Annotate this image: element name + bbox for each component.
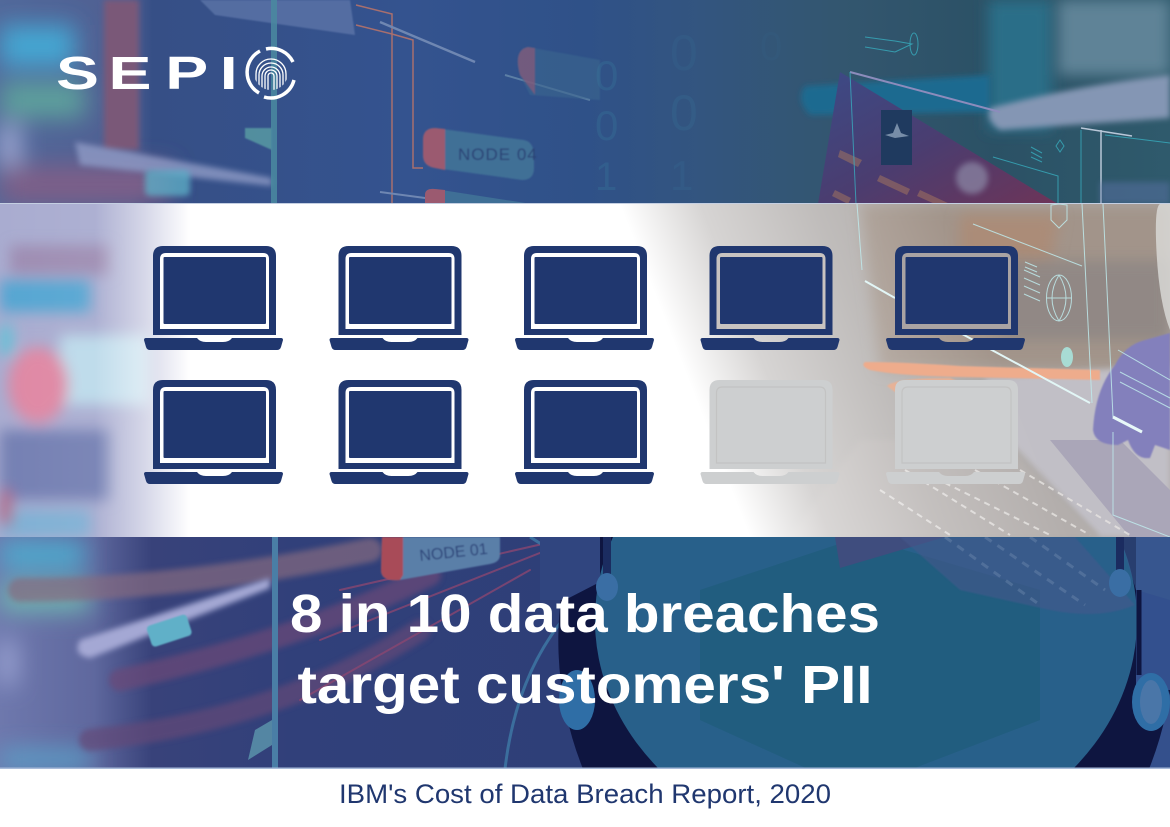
binary digits: 0 [595, 52, 618, 99]
white band [0, 204, 1170, 537]
laptop icon grid [144, 246, 1025, 484]
node 04 label: NODE 04 [458, 145, 538, 164]
laptop 2 [330, 246, 468, 350]
logo: SEPIO: P [165, 47, 208, 99]
disc arm knobs [559, 537, 1170, 731]
icon: fingerprint ring [247, 48, 294, 98]
logo: SEPIO [56, 47, 294, 99]
title line 2: target customers' PII [298, 655, 872, 715]
title line 1: 8 in 10 data breaches [290, 584, 880, 644]
binary digits [596, 61, 616, 190]
laptop 1 [144, 246, 283, 350]
laptop 8 [515, 380, 654, 484]
hard drive disc with dark rim [540, 537, 1170, 769]
laptop 9, greyed [700, 380, 840, 484]
blurred lights on the left [0, 204, 190, 537]
logo: SEPIO: S [56, 47, 99, 99]
node 01 label [381, 537, 500, 580]
hand [863, 333, 1170, 458]
top background photo [0, 0, 1170, 204]
hologram interface [857, 204, 1170, 537]
bottom background photo [0, 537, 1170, 769]
node 01 label: NODE 01 [419, 541, 489, 565]
faded laptop photo on the right [620, 204, 1170, 537]
binary digits: 0 [595, 102, 618, 149]
source caption: IBM's Cost of Data Breach Report, 2020 [339, 779, 831, 809]
binary digits: 0 [670, 25, 698, 81]
laptop 4 [700, 246, 840, 350]
laptop 7 [330, 380, 468, 484]
laptop 6 [144, 380, 283, 484]
laptop 10, greyed [886, 380, 1025, 484]
binary digits: 1 [670, 152, 693, 199]
logo: SEPIO: E [109, 47, 151, 99]
laptop 5 [886, 246, 1025, 350]
right side screen and desk [801, 0, 1170, 204]
binary digits: 0 [760, 25, 782, 69]
binary digits: 0 [670, 85, 698, 141]
binary digits: 1 [595, 155, 617, 199]
red cable streaks [20, 540, 560, 740]
laptop 3 [515, 246, 654, 350]
node 04 label [423, 128, 538, 180]
logo: SEPIO: I [220, 47, 238, 99]
